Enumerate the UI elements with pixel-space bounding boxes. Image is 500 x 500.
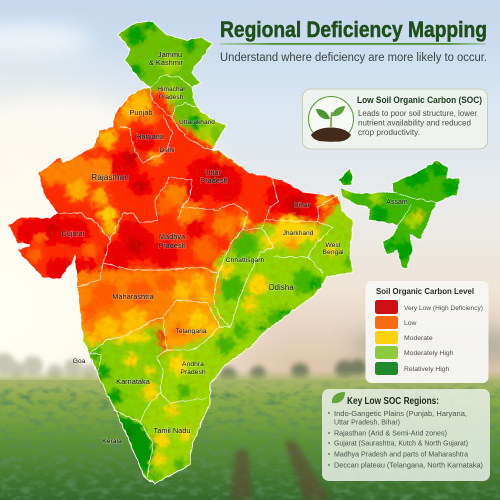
- icon: seedling in soil: [308, 96, 354, 142]
- Karnataka: [85, 325, 165, 425]
- icon: leaf: [332, 392, 345, 403]
- East: [215, 225, 360, 350]
- state labels: Karnataka: [116, 377, 151, 386]
- legend: moderately high: Moderately High: [404, 350, 454, 357]
- state labels: Bengal: [322, 249, 344, 256]
- North east: [333, 161, 460, 268]
- state labels: Bihar: [294, 202, 311, 209]
- panel: key low SOC regions: [322, 389, 490, 481]
- Telangana: [165, 300, 222, 352]
- list of regions: Gujarat (Saurashtra, Kutch & North Gujarat): [334, 438, 468, 448]
- panel: low soil organic carbon: Low Soil Organic Carbon (SOC): [357, 95, 482, 105]
- legend: low: Low: [404, 320, 417, 327]
- state labels: Odisha: [268, 283, 294, 292]
- panel: low soil organic carbon: crop productivity.: [358, 128, 420, 137]
- state labels: Madhya: [159, 232, 186, 241]
- state labels: Goa: [73, 358, 86, 365]
- South east: [140, 330, 220, 480]
- panel: low soil organic carbon: nutrient availability and reduced: [358, 118, 471, 128]
- state labels: Andhra: [182, 361, 204, 368]
- state labels: Punjab: [129, 108, 153, 117]
- legend: very low: Very Low (High Deficiency): [404, 305, 483, 312]
- list of regions: Indo-Gangetic Plains (Punjab, Haryana,: [334, 409, 467, 418]
- state labels: & Kashmir: [149, 58, 184, 67]
- list of regions: Uttar Pradesh, Bihar): [334, 418, 400, 426]
- state labels: Pradesh: [158, 241, 186, 250]
- state labels: Uttar: [205, 168, 222, 177]
- state labels: Pradesh: [180, 369, 206, 376]
- state labels: Chhattisgarh: [226, 257, 264, 264]
- panel: legend: Soil Organic Carbon Level: [376, 286, 474, 296]
- state labels: Telangana: [175, 328, 207, 335]
- panel: low soil organic carbon: Leads to poor soil structure, lower: [358, 109, 477, 118]
- state labels: Maharashtra: [112, 292, 155, 301]
- list of regions: Deccan plateau (Telangana, North Karnataka): [334, 460, 483, 470]
- north-west and centre warm: [0, 90, 345, 290]
- Maharashtra: [70, 268, 218, 355]
- state labels: Pradesh: [159, 94, 184, 101]
- state labels: West: [325, 242, 341, 249]
- panel: key low SOC regions: Key Low SOC Regions:: [347, 396, 439, 407]
- state labels: Tamil Nadu: [154, 426, 190, 435]
- Kerala: [110, 410, 155, 482]
- panel: legend: [366, 281, 488, 383]
- state labels: Uttarakhand: [179, 119, 215, 126]
- panel: low soil organic carbon: [302, 89, 488, 149]
- state labels: Delhi: [159, 147, 175, 154]
- state labels: Rajasthan: [91, 172, 129, 182]
- state labels: Haryana: [136, 132, 165, 141]
- title underline: [220, 43, 486, 45]
- list of regions: Rajasthan (Arid & Semi-Arid zones): [334, 428, 447, 438]
- list of regions: Madhya Pradesh and parts of Maharashtra: [334, 450, 468, 458]
- legend: moderate: Moderate: [404, 335, 433, 342]
- state labels: Kerala: [102, 438, 122, 445]
- state labels: Pradesh: [200, 176, 228, 185]
- state labels: Assam: [386, 199, 408, 206]
- legend: relatively high: Relatively High: [404, 366, 450, 373]
- list of regions: [328, 409, 483, 470]
- state labels: Jammu: [158, 50, 182, 59]
- state labels: Gujarat: [62, 231, 85, 238]
- state labels: Jharkhand: [283, 230, 314, 237]
- block texture over the colour field: [18, 22, 458, 474]
- state labels: [62, 50, 408, 445]
- state boundaries: [57, 75, 437, 478]
- north greens: [118, 22, 226, 157]
- state labels: Himachal: [157, 86, 185, 93]
